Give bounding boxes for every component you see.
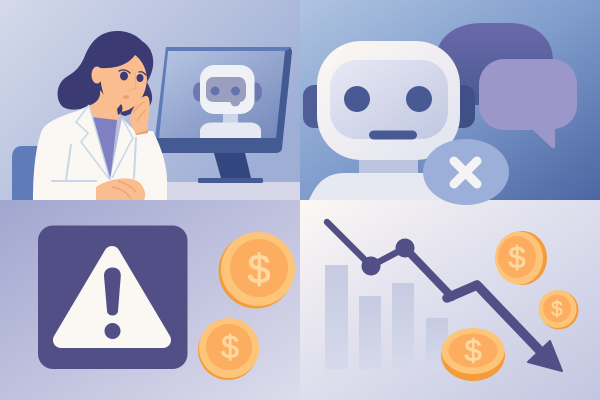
desk [160,182,300,200]
warning sign [38,226,188,369]
coin right: $ [551,298,563,321]
folded hands [96,178,145,200]
chair [12,146,38,200]
hair [58,31,153,116]
coin large [218,232,295,308]
robot neck [359,158,418,174]
monitor [155,47,292,183]
bar chart [325,265,448,369]
light speech bubble [479,59,577,148]
panel: doctor and monitor [0,0,300,200]
coin bottom [441,328,505,381]
panel: falling chart and coins [300,139,600,400]
panel: warning and coins [0,200,300,400]
robot ears [303,85,475,128]
x badge [423,139,509,205]
coin bottom: $ [464,333,482,368]
coin large: $ [248,246,271,292]
falling trend arrow [327,222,562,371]
dark speech bubble [437,23,553,105]
doctor [33,55,167,200]
coin right [538,290,578,330]
coin small: $ [221,329,239,365]
coin small [198,318,259,380]
hand at chin [130,96,150,135]
robot body [309,173,455,200]
panel: robot with speech bubbles [300,0,600,200]
coin top [495,231,547,285]
robot head [317,41,460,160]
robot on screen [193,65,262,138]
coin top: $ [508,240,526,275]
